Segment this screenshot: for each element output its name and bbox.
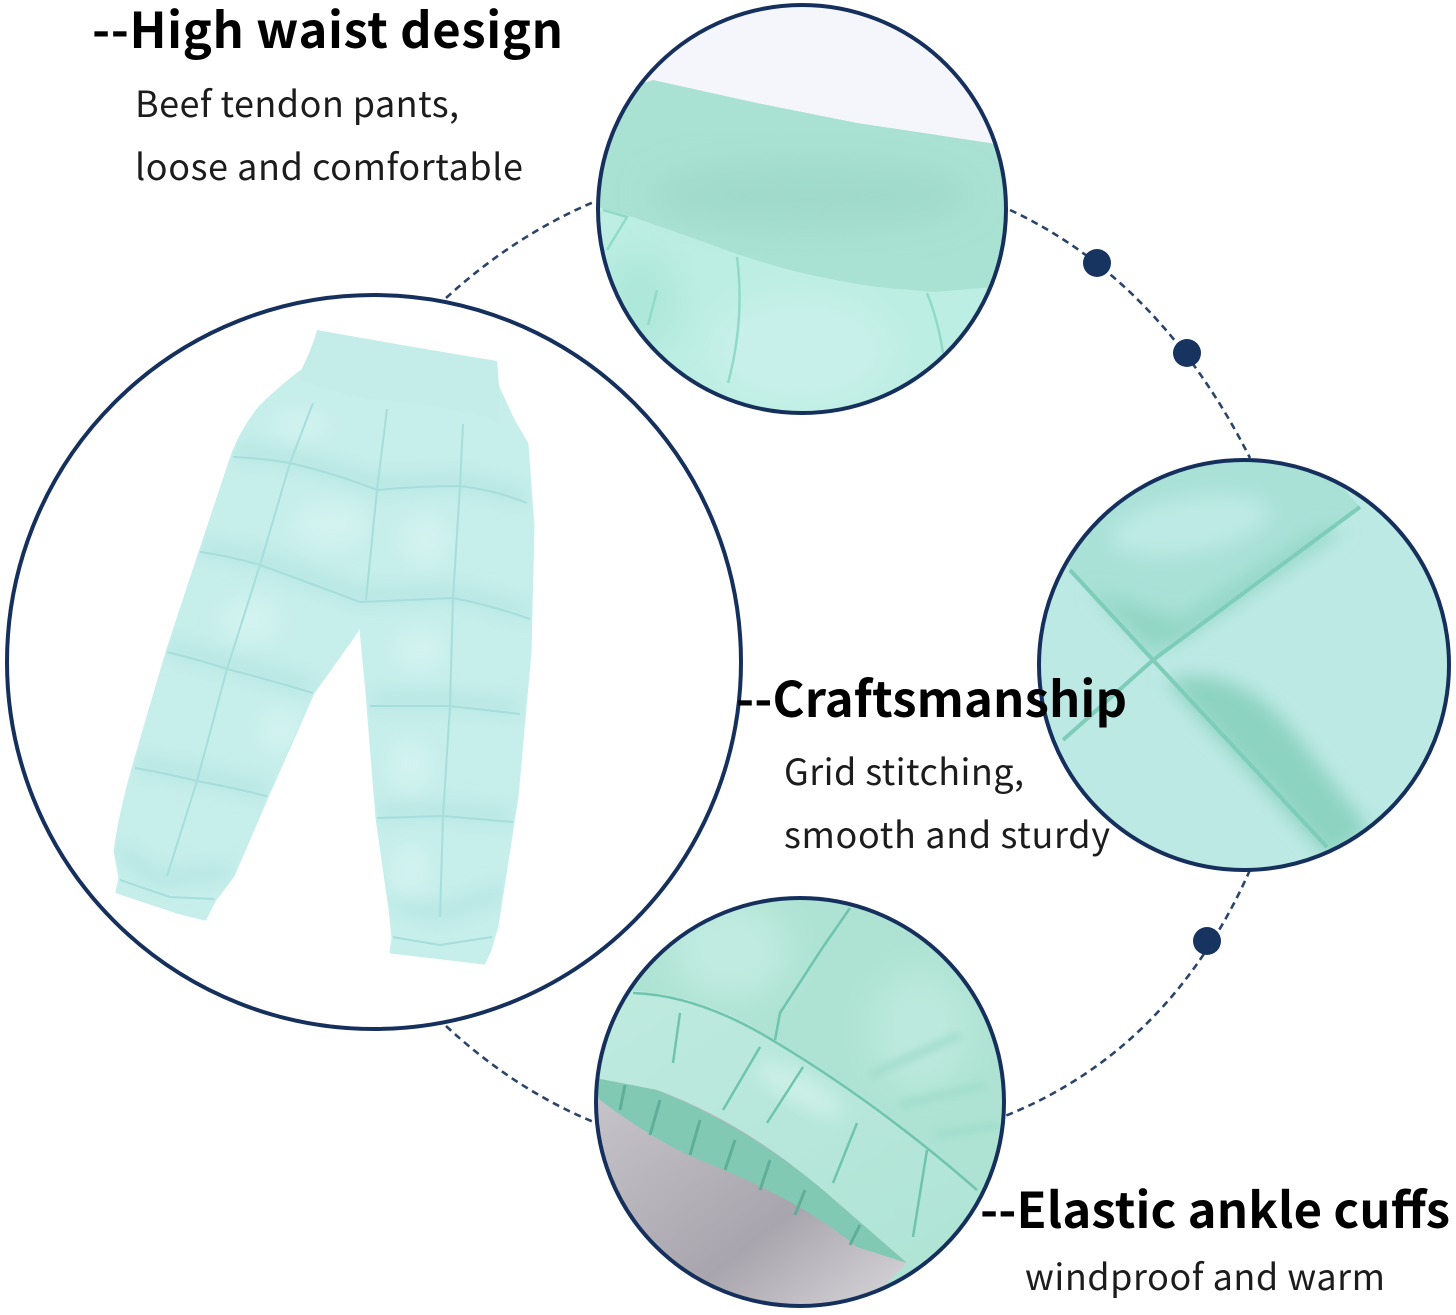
heading: elastic ankle cuffs: --Elastic ankle cuffs <box>980 1172 1450 1243</box>
ring dot upper <box>1083 249 1111 277</box>
ring dot lower <box>1193 927 1221 955</box>
heading: craftsmanship: --Craftsmanship <box>736 661 1127 732</box>
text: ankle cuffs description: windproof and warm <box>1025 1249 1385 1301</box>
panel: main pants circle <box>7 295 741 1029</box>
text: craftsmanship description <box>784 744 1110 859</box>
ring dot middle <box>1173 339 1201 367</box>
text: high waist description: Beef tendon pants, <box>135 76 459 128</box>
text: craftsmanship description: Grid stitching, <box>784 744 1024 796</box>
text: high waist description: loose and comfortable <box>135 139 523 191</box>
panel: waistband detail circle <box>590 0 1020 420</box>
illustration: quilted pants <box>115 330 533 963</box>
dashed ring connecting the circles <box>446 201 1250 1123</box>
panel: grid stitching detail circle <box>1030 440 1456 880</box>
text: high waist description <box>135 76 523 191</box>
panel: ankle cuff detail circle <box>590 895 1015 1315</box>
text: craftsmanship description: smooth and sturdy <box>784 807 1110 859</box>
